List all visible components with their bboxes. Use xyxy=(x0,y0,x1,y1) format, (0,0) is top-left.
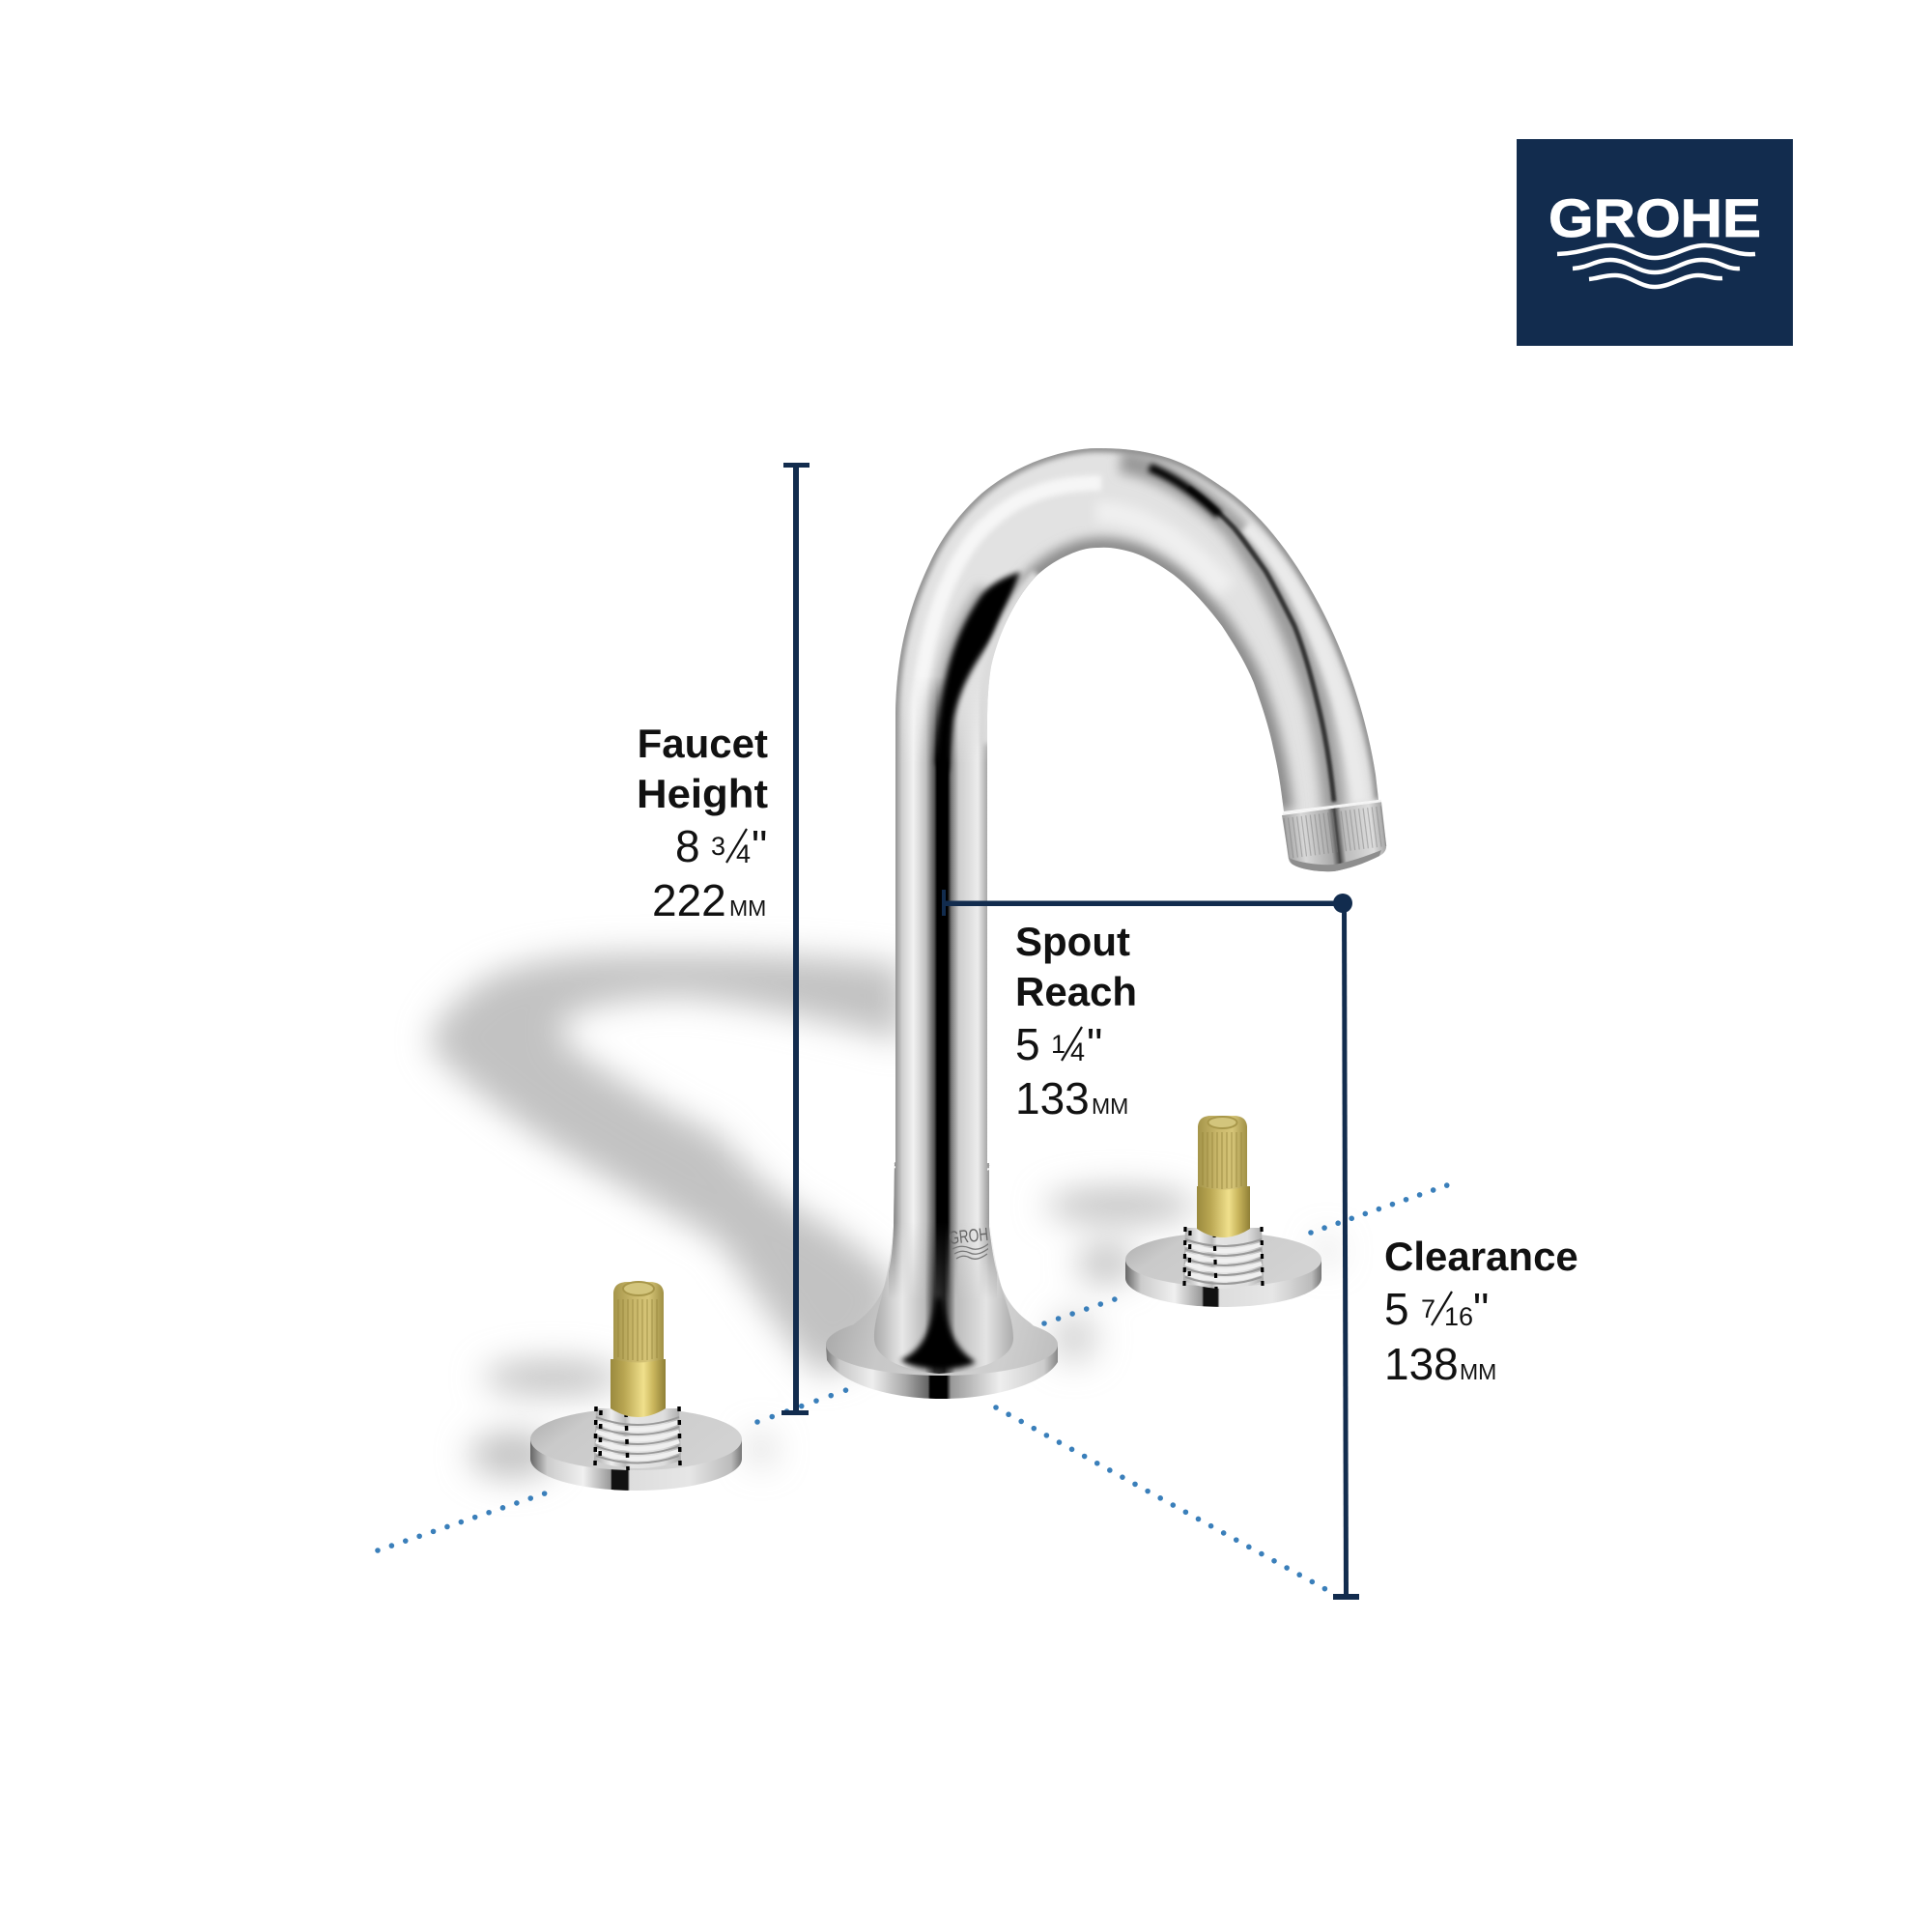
label: clearance: Clearance xyxy=(1384,1234,1578,1279)
faucet xyxy=(826,448,1386,1399)
dimension line: clearance xyxy=(1333,903,1359,1600)
dotted installation guide lines xyxy=(378,1185,1447,1589)
label: spout reach: Spout xyxy=(1015,919,1130,964)
logo: GROHE xyxy=(1517,139,1793,346)
label: faucet height: MM xyxy=(729,895,766,921)
left disc xyxy=(530,1408,742,1491)
right cartridge handle base xyxy=(1125,1116,1321,1307)
label: spout reach: Reach xyxy=(1015,969,1137,1014)
right threads xyxy=(1183,1227,1264,1289)
dimension line: faucet height xyxy=(781,463,810,1415)
faucet aerator nozzle xyxy=(1282,801,1386,871)
label: faucet height: 3 xyxy=(711,832,725,861)
label: spout reach: 1 xyxy=(1051,1030,1065,1059)
label: clearance: 16 xyxy=(1444,1302,1473,1331)
label: faucet height: Faucet xyxy=(638,721,768,766)
label: clearance: 138 xyxy=(1384,1339,1459,1389)
cast shadows on the surface xyxy=(430,954,1339,1478)
label: clearance: MM xyxy=(1460,1359,1496,1384)
logo: GROHE: GROHE xyxy=(1548,187,1761,248)
label: faucet height: 8 xyxy=(675,821,700,871)
label: faucet height: 4 xyxy=(736,839,751,868)
label: spout reach: 133 xyxy=(1015,1073,1090,1123)
label: spout reach: 4 xyxy=(1070,1037,1085,1066)
left brass stem xyxy=(611,1282,666,1417)
label: spout reach: " xyxy=(1087,1019,1102,1069)
right disc xyxy=(1125,1233,1321,1307)
label: spout reach: 5 xyxy=(1015,1019,1040,1069)
dimension line: spout reach xyxy=(942,890,1352,916)
left cartridge handle base xyxy=(530,1282,742,1491)
label: faucet height xyxy=(637,721,768,925)
label: clearance: 5 xyxy=(1384,1284,1409,1334)
faucet lower body xyxy=(854,1162,1034,1374)
label: faucet height: Height xyxy=(637,771,768,816)
label: clearance: " xyxy=(1473,1284,1489,1334)
label: faucet height: 222 xyxy=(652,875,726,925)
label: clearance: 7 xyxy=(1421,1294,1435,1323)
engraved GROHE logo on the stem: GROHE xyxy=(948,1224,998,1249)
label: clearance xyxy=(1384,1234,1578,1389)
faucet base flange xyxy=(826,1314,1058,1399)
label: spout reach: MM xyxy=(1092,1094,1128,1119)
label: faucet height: " xyxy=(752,821,767,871)
engraved GROHE logo on the stem xyxy=(950,1227,988,1260)
faucet spout tube xyxy=(895,448,1378,1188)
right brass stem xyxy=(1197,1116,1250,1237)
left threads xyxy=(594,1406,681,1470)
label: spout reach xyxy=(1015,919,1137,1123)
